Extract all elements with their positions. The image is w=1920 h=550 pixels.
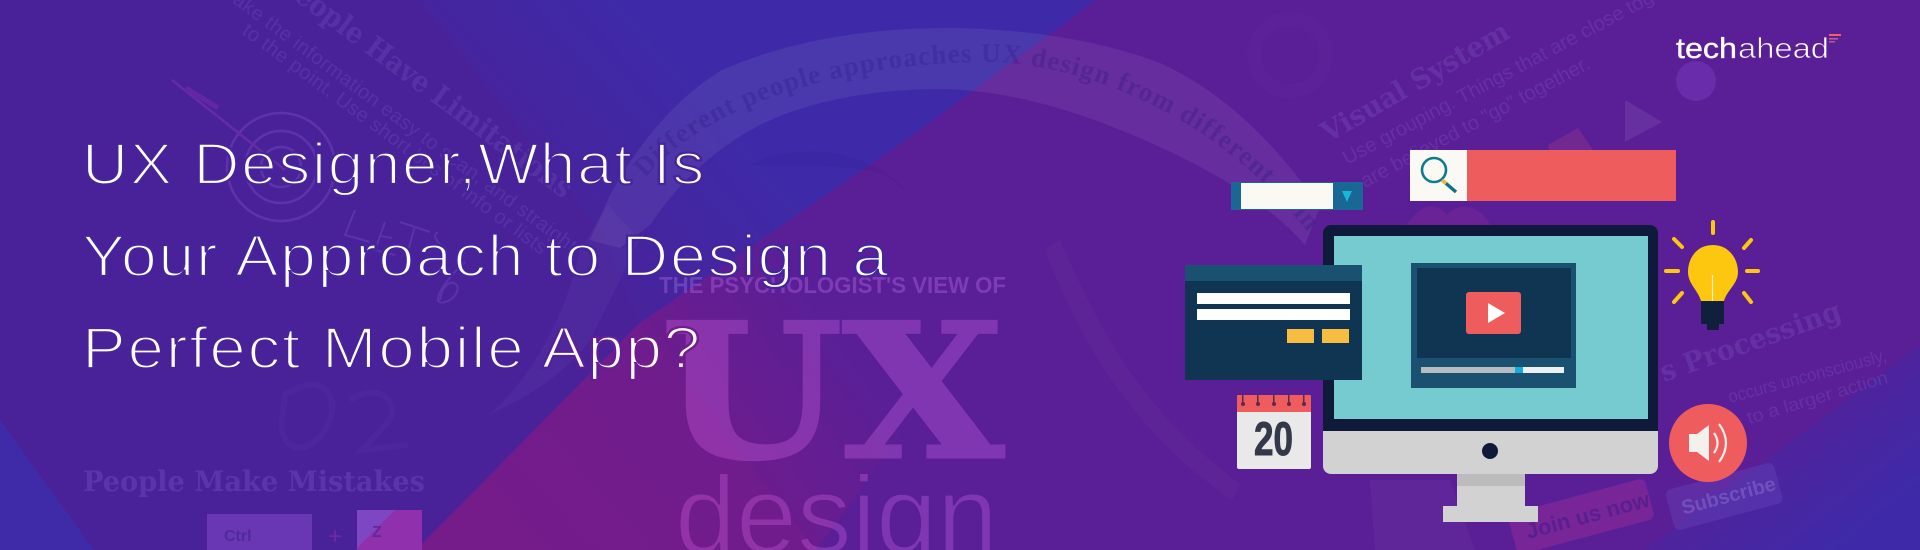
icon: calendar (1237, 394, 1311, 469)
title: UX Designer,What Is (82, 132, 706, 197)
icon: magnifier (1422, 158, 1456, 192)
watermark: people make mistakes (83, 465, 425, 550)
watermark: people make mistakes: Z (372, 524, 382, 541)
screen (1334, 236, 1648, 419)
icon: dropdown (1231, 182, 1363, 210)
stand (1443, 474, 1538, 522)
watermark: subscribe button: Subscribe (1679, 473, 1778, 519)
panel: form window (1185, 265, 1362, 380)
watermark: subscribe button (1665, 462, 1784, 531)
watermark: processing text: occurs unconsciously, (1726, 345, 1888, 407)
watermark: people make mistakes: + (328, 523, 342, 550)
watermark: UX: UX (661, 282, 1005, 501)
logo: techahead: ahead (1738, 33, 1829, 65)
watermark: people make mistakes: People Make Mistakes (83, 465, 425, 498)
title: Perfect Mobile App? (82, 316, 702, 381)
video player (1411, 263, 1576, 388)
watermark: visual system: are believed to "go" together. (1357, 53, 1594, 192)
watermark: visual system: Visual System (1314, 14, 1515, 150)
icon: light bulb (1666, 222, 1758, 330)
icon: desktop monitor (1323, 225, 1658, 522)
watermark: let's doodle (345, 210, 465, 303)
watermark: circle numeral (282, 385, 408, 450)
watermark: circular arc band with text (590, 28, 1318, 248)
logo: techahead (1676, 33, 1841, 65)
watermark: psychologist's view heading: THE PSYCHOLOGIST'S VIEW OF (659, 272, 1006, 298)
icon: search bar (1410, 150, 1676, 201)
watermark: eagle silhouette (1045, 240, 1240, 500)
camera dot (1482, 443, 1498, 459)
monitor body (1323, 225, 1658, 431)
watermark: processing text: to a larger action (1744, 367, 1890, 428)
watermark: join us now button: Join us now (1523, 487, 1653, 544)
watermark: target and arrow (172, 80, 335, 221)
logo: techahead: tech (1676, 33, 1737, 65)
watermark: processing text: s Processing (1655, 294, 1845, 389)
title (82, 132, 890, 381)
watermark: join us now button (1507, 478, 1655, 550)
watermark: people make mistakes: Ctrl (224, 528, 252, 545)
title: Your Approach to Design a (82, 224, 890, 289)
icon: speaker (1669, 404, 1747, 482)
watermark: shapes (1254, 19, 1716, 225)
watermark: people have limitations: to the point. Use short bits of info or lists (238, 19, 552, 259)
icon: calendar: 20 (1254, 412, 1293, 465)
watermark: processing text (1655, 294, 1890, 428)
